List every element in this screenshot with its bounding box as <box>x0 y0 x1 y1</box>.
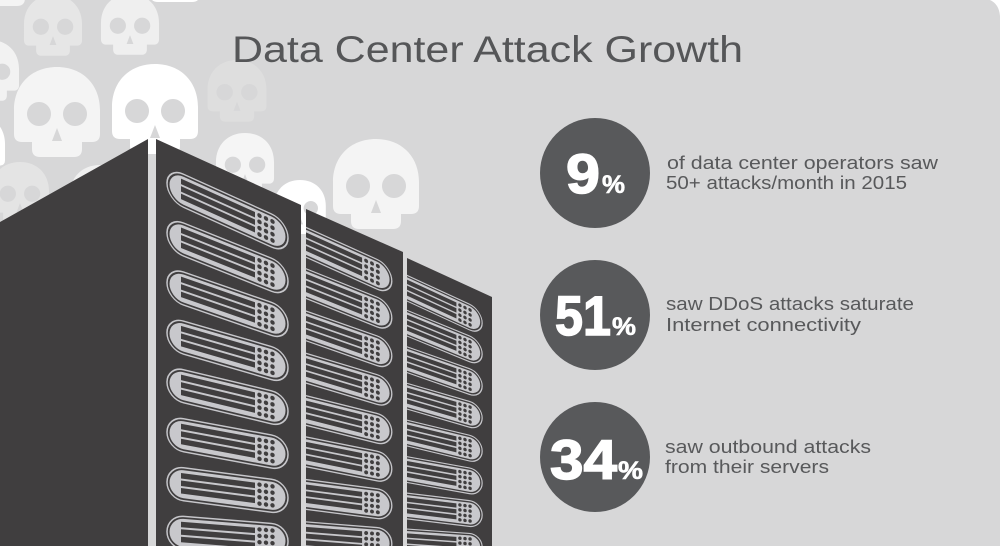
stat number: 9 <box>566 142 600 205</box>
rack left face <box>0 139 148 546</box>
stat circle <box>540 118 650 228</box>
rack face column 1 <box>156 139 301 546</box>
page corner <box>990 0 1000 16</box>
stat number: 34 <box>550 428 617 491</box>
percent sign: % <box>618 457 643 485</box>
description: saw DDoS attacks saturate <box>666 294 914 314</box>
server units column 1 <box>167 167 288 546</box>
title: Data Center Attack Growth <box>232 28 743 70</box>
server rack <box>0 139 492 546</box>
percent sign: % <box>612 313 636 341</box>
stat number: 51 <box>555 284 611 347</box>
stat: 51% <box>540 260 914 370</box>
stat: 9% <box>540 118 939 228</box>
rack face column 2 <box>306 209 403 546</box>
description: saw outbound attacks <box>665 437 871 457</box>
description: from their servers <box>665 457 829 477</box>
stat circle <box>540 260 650 370</box>
skull cluster <box>0 0 419 234</box>
rack face column 3 <box>407 258 492 546</box>
server units column 2 <box>306 226 392 546</box>
description: of data center operators saw <box>667 153 939 173</box>
server units column 3 <box>407 274 483 546</box>
stat circle <box>540 402 650 512</box>
description: 50+ attacks/month in 2015 <box>666 173 907 193</box>
percent sign: % <box>602 171 625 199</box>
description: Internet connectivity <box>666 315 861 335</box>
stat: 34% <box>540 402 871 512</box>
